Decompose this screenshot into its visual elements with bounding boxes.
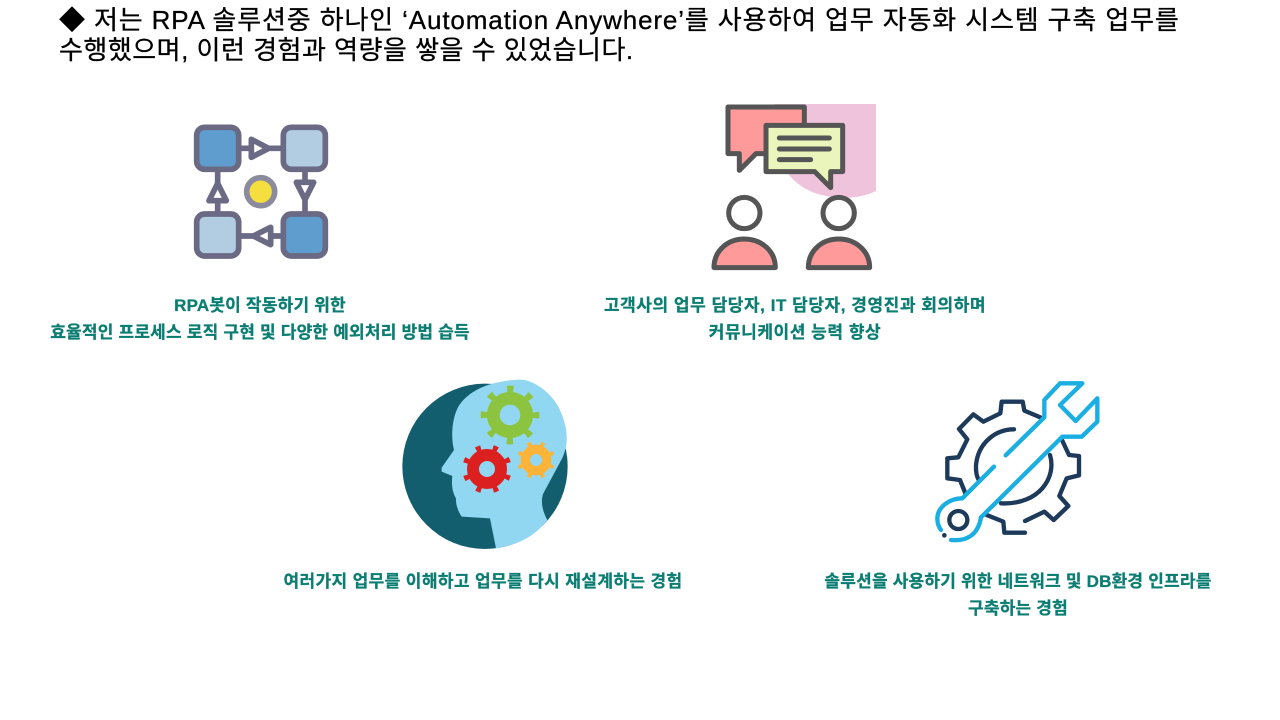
title: 수행했으며, 이런 경험과 역량을 쌓을 수 있었습니다. [59, 35, 634, 65]
caption: business redesign: 여러가지 업무를 이해하고 업무를 다시 재설계하는 경험 [283, 572, 683, 591]
caption: communication: 커뮤니케이션 능력 향상 [709, 323, 881, 342]
icon: process flow loop [194, 124, 328, 259]
caption: infrastructure: 구축하는 경험 [968, 599, 1068, 618]
title: ◆ 저는 RPA 솔루션중 하나인 ‘Automation Anywhere’를 사용하여 업무 자동화 시스템 구축 업무를 [59, 5, 1180, 35]
caption: RPA bot process logic: 효율적인 프로세스 로직 구현 및 다양한 예외처리 방법 습득 [50, 323, 470, 342]
caption: RPA bot process logic: RPA봇이 작동하기 위한 [174, 296, 346, 315]
caption: communication [604, 296, 986, 342]
caption: communication: 고객사의 업무 담당자, IT 담당자, 경영진과 회의하며 [604, 296, 986, 315]
icon: gear and wrench [935, 381, 1100, 542]
icon: two people in conversation [712, 104, 876, 270]
icon: head with gears [402, 380, 568, 549]
caption: RPA bot process logic [50, 296, 470, 342]
title [59, 5, 1180, 65]
caption: infrastructure [824, 572, 1212, 618]
caption: infrastructure: 솔루션을 사용하기 위한 네트워크 및 DB환경 인프라를 [824, 572, 1212, 591]
